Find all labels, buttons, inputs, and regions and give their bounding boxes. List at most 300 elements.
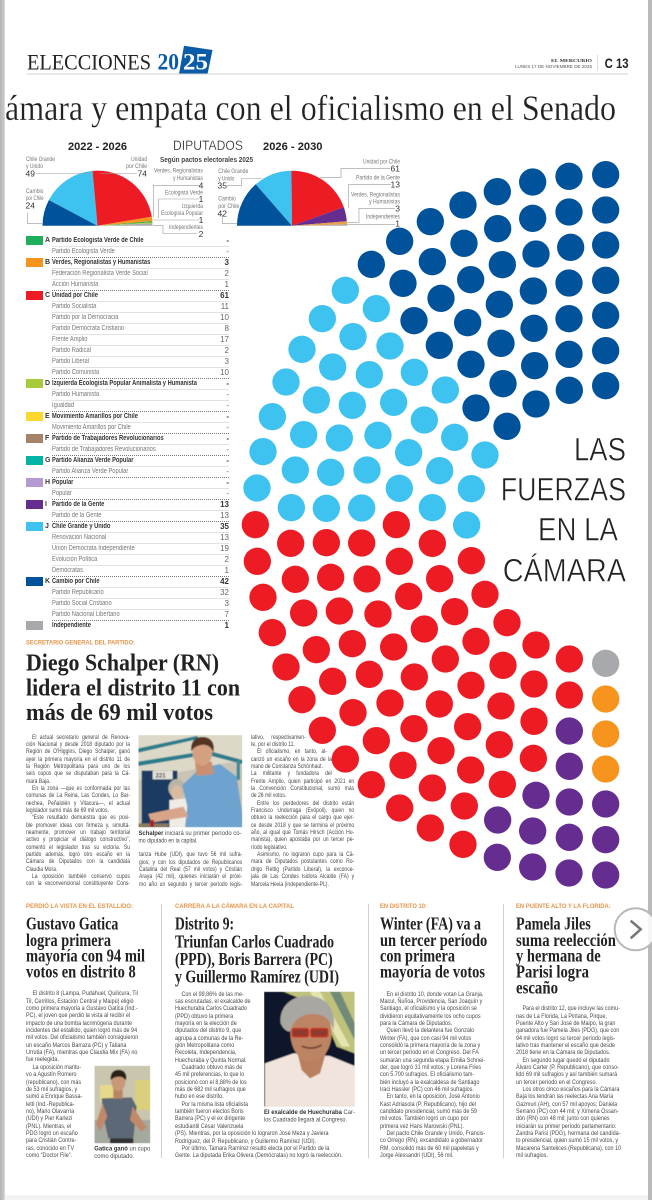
- body text: [380, 991, 485, 1159]
- results table by party: D: [45, 380, 50, 386]
- labels half pie 2022-2026: 49: [26, 168, 35, 178]
- results table by party: 1: [225, 620, 229, 630]
- body text column 3 narrow: El oficialismo, en tanto, al-: [257, 748, 327, 755]
- photo caption: los Cuadrado llegará al Congreso.: [264, 1116, 347, 1123]
- labels half pie 2022-2026: Ecologista Popular: [161, 210, 203, 217]
- article headline: lidera el distrito 11 con: [26, 676, 240, 702]
- results table by party: Unión Demócrata Independiente: [52, 544, 134, 552]
- results table by party: -: [226, 478, 229, 486]
- results table by party: Igualdad: [52, 402, 74, 408]
- body text column 3 bottom: ríodo legislativo.: [251, 844, 287, 851]
- results table by party: Independiente: [52, 622, 91, 628]
- body text beside photo: Huechuraba Carlos Cuadrado: [175, 1005, 247, 1012]
- labels half pie 2022-2026: Cambio: [26, 188, 44, 195]
- body text: lidó 69 mil sufragios y así también sumará: [516, 1071, 617, 1078]
- kicker: EN DISTRITO 10:: [380, 903, 427, 910]
- results table by party: 8: [225, 324, 229, 332]
- body text full width: [26, 990, 138, 1063]
- seats: Verdes, Regionalistas y Humanistas 3: [592, 685, 619, 783]
- photo caption: Schalper iniciará su primer período co-: [138, 830, 242, 837]
- results table by party: J: [45, 522, 49, 530]
- body text beside photo: como “Doctor File”.: [26, 1152, 72, 1159]
- big label: las fuerzas en la cámara: EN LA: [538, 512, 618, 548]
- body text column 1: ble promover ideas con firmeza y, simultá-: [26, 822, 130, 829]
- results table by party: Movimiento Amarillos por Chile: [52, 424, 130, 430]
- article headline: logra primera: [26, 930, 111, 950]
- results table by party: Partido Nacional Libertario: [52, 610, 119, 618]
- body text: 2018 tiene en la Cámara de Diputados.: [516, 1049, 610, 1056]
- labels half pie 2026-2030: Cambio: [218, 195, 236, 202]
- results table by party: Popular: [52, 478, 73, 486]
- body text full width: El distrito 8 (Lampa, Pudahuel, Quilicura, Til: [32, 990, 138, 997]
- results table by party: Partido de la Gente: [52, 512, 101, 518]
- labels half pie 2026-2030: Unidad por Chile: [363, 158, 400, 166]
- page number: C 13: [605, 55, 629, 71]
- body text column 3 narrow: [251, 748, 332, 777]
- labels half pie 2022-2026: Izquierda: [182, 203, 203, 210]
- labels half pie 2026-2030: 42: [218, 208, 227, 218]
- results table by party: Partido Ecologista Verde de Chile: [52, 236, 143, 244]
- body text column 2: gios; y con los diputados de Republicanos: [138, 859, 242, 866]
- results table by party: -: [226, 400, 229, 410]
- results table by party: Renovación Nacional: [52, 534, 106, 540]
- body text: iniciarán su primer período parlamentario:: [516, 1123, 616, 1130]
- labels half pie 2026-2030: 3: [395, 203, 400, 213]
- body text: Del pacto Chile Grande y Unido, Francis-: [386, 1130, 485, 1137]
- body text column 1: Cámara de Diputados con la candidata: [26, 858, 130, 865]
- results table by party: C: [45, 292, 50, 298]
- body text column 1: [26, 734, 130, 887]
- body text: dón (RN) con 48 mil; junto con quienes: [516, 1115, 610, 1122]
- results table by party: 35: [220, 522, 229, 530]
- results table by party: -: [226, 456, 229, 464]
- body text: candidato presidencial, sumó más de 59: [380, 1108, 477, 1115]
- results table by party: -: [226, 434, 229, 442]
- body text column 1: neamente, promover un trabajo territorial: [26, 829, 130, 836]
- body text: [516, 1005, 621, 1159]
- article headline: [516, 913, 616, 997]
- body text: ganadora fue Pamela Jiles (PDG), que con: [516, 1027, 619, 1034]
- body text beside photo: (republicano), con más: [26, 1079, 81, 1086]
- panel: article Distrito 9: [175, 901, 355, 1159]
- results table by party: 2: [225, 268, 229, 278]
- body text full width: Por último, Tamara Ramírez resultó electa por el Partido de la: [181, 1145, 329, 1152]
- results table by party: Chile Grande y Unido: [52, 522, 110, 530]
- body text column 3 narrow: canzó un escaño en la zona de la: [251, 756, 332, 763]
- labels half pie 2022-2026: 24: [26, 201, 35, 211]
- body text: consolidó la primera mayoría de la zona y: [380, 1042, 480, 1049]
- body text column 1: mara Baja.: [26, 778, 50, 785]
- results table by party: 11: [221, 302, 229, 310]
- article headline: más de 69 mil votos: [26, 700, 213, 726]
- results table by party: Partido de Trabajadores Revolucionarios: [52, 446, 155, 452]
- results table by party: Demócratas: [52, 566, 83, 574]
- results table by party: 1: [225, 566, 229, 574]
- body text column 3 bottom: manista), quien apostaba por un tercer pe-: [251, 836, 354, 843]
- results table by party: Federación Regionalista Verde Social: [52, 270, 147, 276]
- body text: Santiago, el oficialismo y la oposición se: [380, 1005, 477, 1012]
- labels half pie 2026-2030: y Humanistas: [369, 199, 400, 206]
- results table by party: 42: [220, 576, 229, 586]
- body text: 94 mil votos logró su tercer período legis-: [516, 1035, 615, 1042]
- body text: Serrano (PC) con 44 mil; y Ximena Ossan-: [516, 1108, 619, 1115]
- article headline: [380, 914, 488, 981]
- labels half pie 2022-2026: Unidad: [131, 156, 147, 163]
- body text full width: un escaño Marcos Barraza (PC) y Tatiana: [26, 1042, 126, 1049]
- results table by party: 3: [225, 356, 229, 366]
- body text column 3 bottom: año, al igual que Tomás Hirsch (Acción Hu-: [251, 829, 354, 836]
- results table by party: Verdes, Regionalistas y Humanistas: [52, 258, 150, 266]
- big label: las fuerzas en la cámara: LAS: [574, 432, 626, 468]
- body text beside photo: Por la misma lista oficialista: [181, 1101, 248, 1108]
- results table by party: 61: [220, 290, 229, 300]
- results table by party: 2: [225, 554, 229, 564]
- results table by party: Partido Alianza Verde Popular: [52, 468, 128, 474]
- results table by party: 13: [220, 510, 229, 520]
- seats: Cambio por Chile 42: [358, 161, 619, 440]
- body text column 3 bottom: Marcela Hevia (independiente-PL).: [251, 880, 329, 888]
- labels half pie 2022-2026: 1: [199, 194, 204, 204]
- body text full width: Rodríguez, del P. Republicano, y Guillermo Ramírez (UDI).: [175, 1138, 316, 1145]
- body text: lativo tras mantener el escaño que desde: [516, 1042, 615, 1049]
- panel: article Gustavo Gatica: [26, 901, 151, 1160]
- results table by party: Cambio por Chile: [52, 578, 99, 584]
- half pie 2026-2030: [237, 171, 347, 226]
- photo: Schalper voting: 221: [156, 773, 166, 779]
- body text column 1: activo y propiciar el diálogo constructivo”,: [26, 836, 130, 843]
- body text full width: Urrutia (FA), mientras que Claudia Mix (FA) no: [26, 1049, 137, 1056]
- panel: article Pamela Jiles: [516, 903, 621, 1159]
- body text: Zandra Parisi (PDG), hermana del candida-: [516, 1130, 620, 1137]
- labels half pie 2022-2026: Chile Grande: [26, 156, 55, 163]
- results table by party: Partido Republicano: [52, 588, 103, 596]
- results table by party: -: [226, 390, 229, 398]
- body text column 3 bottom: ce desde 2018 y que se termina el próximo: [251, 822, 354, 829]
- results table by party: Partido Social Cristiano: [52, 600, 111, 606]
- body text column 1: Región de O'Higgins, Diego Schalper, ganó: [26, 748, 130, 755]
- column divider: [368, 904, 369, 1158]
- page scan edge: left: [0, 0, 5, 1200]
- photo caption: Gatica ganó un cupo: [94, 1146, 151, 1152]
- photo: Gatica: [94, 1066, 150, 1143]
- body text column 1: comentó el legislador tras su victoria. Su: [26, 844, 130, 851]
- body text column 1: En la zona —que es conformada por las: [32, 785, 130, 792]
- article headline: y hermana de: [516, 946, 601, 966]
- results table by party: Frente Amplio: [52, 336, 87, 342]
- article headline: votos en distrito 8: [26, 961, 136, 981]
- results table by party: -: [226, 236, 229, 244]
- body text full width: mil votos. Del oficialismo también consiguieron: [26, 1034, 138, 1041]
- results table by party: 1: [225, 280, 229, 288]
- article headline: Parisi logra: [516, 961, 589, 981]
- labels half pie 2026-2030: 35: [218, 180, 227, 190]
- body text column 1: comunas de La Reina, Las Condes, Lo Bar-: [26, 792, 130, 799]
- body text beside photo: agrupa a comunas de la Re-: [175, 1035, 243, 1042]
- body text: mil votos. También logró un cupo por: [380, 1115, 468, 1122]
- body text: dividieron equitativamente los ocho cupos: [380, 1013, 481, 1020]
- body text: Baja los tendrán las reelectas Ana María: [516, 1093, 613, 1100]
- newspaper name and date: EL MERCURIO: [551, 58, 593, 63]
- body text: En el distrito 10, donde votan La Granja,: [386, 991, 483, 998]
- body text: Para el distrito 12, que incluye las comu-: [522, 1005, 620, 1012]
- labels half pie 2022-2026: por Chile: [126, 163, 147, 170]
- results table by party: Izquierda Ecologista Popular Animalista y Humanista: [52, 380, 197, 386]
- body text column 1: ayer la primera mayoría en el distrito 11 de: [26, 756, 130, 763]
- article headline: y Guillermo Ramírez (UDI): [175, 967, 339, 987]
- results table by party: Partido Alianza Verde Popular: [52, 456, 133, 464]
- results table by party: [26, 236, 229, 630]
- labels half pie 2022-2026: 4: [199, 180, 204, 190]
- body text column 3 bottom: [250, 778, 354, 888]
- body text beside photo: posicionó con el 8,88% de los: [175, 1079, 247, 1086]
- body text column 3 bottom: obtuvo la reelección para el cargo que ejer-: [251, 814, 354, 821]
- results table by party: Partido Radical: [52, 346, 91, 354]
- labels half pie 2026-2030: Independientes: [366, 214, 400, 221]
- article headline: [26, 914, 145, 981]
- results table by party: A: [45, 236, 50, 244]
- body text beside photo: para Cristián Contre-: [26, 1137, 76, 1144]
- results table by party: -: [226, 378, 229, 388]
- results table by party: 10: [220, 312, 229, 322]
- results table by party: 10: [220, 368, 229, 376]
- article headline: Triunfan Carlos Cuadrado: [175, 931, 334, 951]
- photo caption: como diputado.: [94, 1153, 135, 1160]
- results table by party: B: [45, 258, 50, 266]
- results table by party: Partido Comunista: [52, 368, 99, 376]
- body text: to presidencial, quien sumó 15 mil votos, y: [516, 1137, 618, 1144]
- results table by party: F: [45, 434, 49, 442]
- results table by party: 17: [220, 334, 229, 344]
- panel: diputados half-pie charts: [26, 138, 400, 239]
- labels half pie 2026-2030: Verdes, Regionalistas: [351, 191, 400, 198]
- body text column 3 narrow: La militante y fundadora del: [251, 770, 332, 777]
- kicker: PERDIÓ LA VISTA EN EL ESTALLIDO:: [26, 901, 133, 910]
- body text full width: impacto de una bomba lacrimógena durante: [26, 1020, 132, 1027]
- body text beside photo: PDG logró un escaño: [26, 1130, 78, 1137]
- body text: Jorge Alessandri (UDI), 56 mil.: [380, 1152, 453, 1159]
- results table by party: 7: [225, 610, 229, 618]
- photo caption: [138, 830, 242, 844]
- body text beside photo: Barrera (PC) y el ex dirigente: [175, 1115, 245, 1122]
- results table by party: -: [226, 488, 229, 498]
- labels half pie 2022-2026: 1: [199, 215, 204, 225]
- icon: next arrow button: [614, 907, 652, 952]
- body text: der, que logró 31 mil votos; y Lorena Fries: [380, 1064, 481, 1071]
- body text: Winter (FA), que con casi 94 mil votos: [380, 1035, 471, 1042]
- body text column 3 narrow: mano de Constanza Schönhaut.: [251, 763, 323, 770]
- labels half pie 2022-2026: por Chile: [26, 195, 44, 202]
- results table by party: Partido por la Democracia: [52, 314, 118, 320]
- year badge 2025: 25: [183, 49, 208, 74]
- results table by party: -: [226, 422, 229, 432]
- body text beside photo: gión Metropolitana como: [175, 1042, 234, 1049]
- body text: Iraci Hassler (PC) con 46 mil sufragios.: [380, 1086, 474, 1093]
- body text: con 5.700 sufragios. El oficialismo tam-: [380, 1071, 474, 1078]
- body text full width: PC), el joven que perdió la vista al recibir el: [26, 1012, 130, 1019]
- results table by party: 32: [220, 588, 229, 596]
- body text column 3 bottom: Asimismo, no lograron cupo para la Cá-: [257, 851, 354, 858]
- kicker: CARRERA A LA CÁMARA EN LA CAPITAL: [175, 901, 294, 910]
- body text full width: [175, 1130, 342, 1159]
- body text: co Orrego (RN), excandidato a gobernador: [380, 1137, 483, 1144]
- body text: Puente Alto y San José de Maipo, la gran: [516, 1020, 615, 1027]
- article headline: mayoría de votos: [380, 961, 485, 981]
- body text column 3 top: te, por el distrito 11.: [251, 741, 295, 748]
- body text beside photo: más de 682 mil sufragios que: [175, 1086, 246, 1093]
- body text: un tercer período en el Congreso.: [516, 1079, 597, 1086]
- photo: Carlos Cuadrado: [264, 992, 355, 1107]
- results table by party: Partido Socialista: [52, 302, 96, 310]
- body text: para la Cámara de Diputados.: [380, 1020, 452, 1027]
- results table by party: K: [45, 578, 50, 584]
- body text beside photo: de 53 mil sufragios, y: [26, 1086, 77, 1093]
- labels half pie 2026-2030: Chile Grande: [218, 168, 249, 175]
- body text column 1: nechea, Peñalolén y Vitacura—, el actual: [26, 800, 130, 807]
- photo caption: mo diputado en la capital.: [138, 837, 198, 844]
- body text column 2: Catalina del Real (57 mil votos) y Cristián: [138, 866, 242, 873]
- body text column 2: mo año un segundo y tercer período legis-: [138, 881, 242, 888]
- body text: Los otros cinco escaños para la Cámara: [522, 1086, 619, 1093]
- section title: Elecciones: ELECCIONES: [27, 49, 151, 74]
- body text: Kast Adriasola (P. Republicano), hijo del: [380, 1101, 476, 1108]
- results table by party: -: [226, 412, 229, 420]
- results table by party: Partido Demócrata Cristiano: [52, 324, 124, 332]
- half pie 2022-2026: [42, 171, 152, 226]
- body text beside photo: mayoría en la elección de: [175, 1020, 237, 1027]
- results table by party: Partido Liberal: [52, 358, 89, 364]
- body text column 1: La oposición también conservó cupos: [32, 873, 130, 880]
- results table by party: Evolución Política: [52, 556, 97, 562]
- kicker: EN PUENTE ALTO Y LA FLORIDA:: [516, 903, 611, 910]
- results table by party: Partido Ecologista Verde: [52, 248, 115, 254]
- article headline: mayoría con 94 mil: [26, 946, 145, 966]
- chart title: 2026-2030: 2026 - 2030: [263, 141, 322, 153]
- body text: Macul, Ñuñoa, Providencia, San Joaquín y: [380, 998, 482, 1005]
- body text column 3 bottom: jala de Las Condes Isidora Alcalde (FA) y: [251, 873, 354, 880]
- body text: mil sufragios.: [516, 1152, 548, 1159]
- body text column 1: Claudia Mora.: [26, 866, 57, 873]
- body text beside photo: diputados del distrito 9, que: [175, 1027, 241, 1034]
- body text beside photo: [26, 1064, 82, 1159]
- body text column 1: “Este resultado demuestra que es posi-: [32, 814, 130, 821]
- body text: Quien llevó la delantera fue Gonzalo: [386, 1027, 474, 1034]
- body text column 2: Araya (42 mil), quienes iniciarán el próxi-: [138, 873, 242, 880]
- labels half pie 2022-2026: Independientes: [169, 224, 203, 231]
- results table by party: H: [45, 478, 50, 486]
- body text column 2: tanza Hube (UDI), que tuvo 56 mil sufra-: [138, 851, 242, 858]
- labels half pie 2026-2030: Partido de la Gente: [356, 175, 400, 182]
- body text column 3 bottom: de 26 mil votos.: [251, 792, 286, 799]
- body text column 1: seis cupos que se disputaban para la Cá-: [26, 770, 130, 777]
- body text full width: incidentes del estallido, quien logró más de 94: [26, 1027, 137, 1034]
- body text beside photo: hubo en ese distrito.: [175, 1093, 224, 1100]
- kicker: SECRETARIO GENERAL DEL PARTIDO:: [26, 639, 135, 646]
- column divider: [503, 904, 504, 1158]
- body text column 3 bottom: mara de Diputados postulantes como Ro-: [251, 858, 354, 865]
- body text beside photo: sumó a Enrique Bassa-: [26, 1093, 82, 1100]
- body text full width: Til, Cerrillos, Estación Central y Maipú) eligió: [26, 998, 134, 1005]
- body text beside photo: (UDI) y Pier Karlezi: [26, 1115, 72, 1122]
- body text column 3 bottom: Entre los perdedores del distrito están: [257, 800, 354, 807]
- big label: las fuerzas en la cámara: FUERZAS: [501, 472, 626, 508]
- body text: bién incluyó a la exalcaldesa de Santiago: [380, 1079, 479, 1086]
- big label: las fuerzas en la cámara: [501, 432, 626, 589]
- body text column 3 top: lativo, respectivamen-: [251, 734, 306, 741]
- body text column 3 bottom: Frente Amplio, quien participó en 2021 en: [251, 778, 354, 785]
- page scan edge: right: [648, 0, 652, 1200]
- body text beside photo: [175, 991, 251, 1130]
- body text: En tanto, en la oposición, José Antonio: [386, 1093, 480, 1100]
- body text: En segundo lugar quedó el diputado: [522, 1057, 609, 1064]
- photo caption: [264, 1109, 355, 1123]
- body text beside photo: vo a Agustín Romero: [26, 1071, 77, 1078]
- article headline: Distrito 9:: [175, 913, 234, 933]
- body text beside photo: Con el 99,86% de las me-: [181, 991, 244, 998]
- results table by party: I: [45, 500, 47, 508]
- seats: Partido de la Gente 13: [484, 717, 619, 889]
- body text column 3 bottom: drigo Rettig (Partido Liberal), la exconce-: [251, 866, 354, 873]
- body text column 1: la Región Metropolitana para uno de los: [26, 763, 130, 770]
- body text column 1: El actual secretario general de Renova-: [32, 734, 130, 741]
- body text beside photo: (PPD) obtuvo la primera: [175, 1013, 233, 1020]
- newspaper name and date: [515, 58, 593, 69]
- photo: Schalper voting: [138, 735, 242, 827]
- body text beside photo: Recoleta, Independencia,: [175, 1049, 236, 1056]
- results table by party: Acción Humanista: [52, 280, 98, 288]
- article headline: suma reelección: [516, 930, 616, 950]
- body text column 3 bottom: la Convención Constitucional, sumó más: [251, 785, 354, 792]
- labels half pie 2022-2026: y Humanistas: [173, 175, 203, 182]
- big label: las fuerzas en la cámara: CÁMARA: [503, 553, 626, 589]
- results table by party: G: [45, 456, 50, 464]
- labels half pie 2026-2030: [218, 158, 400, 229]
- labels half pie 2022-2026: 74: [138, 168, 147, 178]
- results table by party: Partido Humanista: [52, 390, 99, 398]
- body text column 1: legislador sumó más de 69 mil votos.: [26, 807, 109, 814]
- body text column 3 bottom: Francisco Undurraga (Evópoli), quien no: [251, 807, 354, 814]
- results table by party: 3: [225, 598, 229, 608]
- body text beside photo: letti (Ind.-Republica-: [26, 1101, 74, 1108]
- body text full width: fue reelegida.: [26, 1056, 59, 1063]
- results table by party: 19: [220, 544, 229, 552]
- article headline: con primera: [380, 946, 455, 966]
- body text: RM, consolidó más de 60 mil papeletas y: [380, 1145, 479, 1152]
- year badge 2025: [158, 46, 212, 74]
- labels half pie 2022-2026: [26, 156, 204, 239]
- body text beside photo: Huechuraba y Quinta Normal.: [175, 1057, 247, 1064]
- body text column 1: con la exconvencional constituyente Cons-: [26, 880, 130, 887]
- photo caption: El exalcalde de Huechuraba Car-: [264, 1109, 355, 1116]
- chart title: 2022-2026: 2022 - 2026: [68, 141, 127, 153]
- labels half pie 2022-2026: Ecologista Verde: [165, 190, 203, 197]
- body text: nas de La Florida, La Pintana, Pirque,: [516, 1013, 607, 1020]
- body text beside photo: 45 mil preferencias, lo que lo: [175, 1071, 244, 1078]
- body text beside photo: no), Mario Olavarría: [26, 1108, 74, 1115]
- body text beside photo: (PNL). Mientras, el: [26, 1123, 71, 1130]
- seats: Unidad por Chile 61: [242, 511, 583, 858]
- article headline: Diego Schalper (RN): [26, 651, 219, 677]
- results table by party: 2: [225, 346, 229, 354]
- chart subtitle: Según pactos electorales 2025: [160, 157, 253, 164]
- page scan edge: bottom: [5, 1195, 648, 1200]
- labels half pie 2026-2030: por Chile: [218, 203, 240, 210]
- body text beside photo: ras, conocido en TV: [26, 1145, 74, 1152]
- body text full width: Gente. La diputada Erika Olivera (Demócratas) no logró la reelección.: [175, 1152, 342, 1159]
- seats: Chile Grande y Unido 35: [243, 277, 499, 539]
- body text column 1: ción Nacional y desde 2018 diputado por la: [26, 741, 130, 748]
- parliament dot chart: la cámara: [242, 161, 620, 889]
- page header: [27, 46, 629, 74]
